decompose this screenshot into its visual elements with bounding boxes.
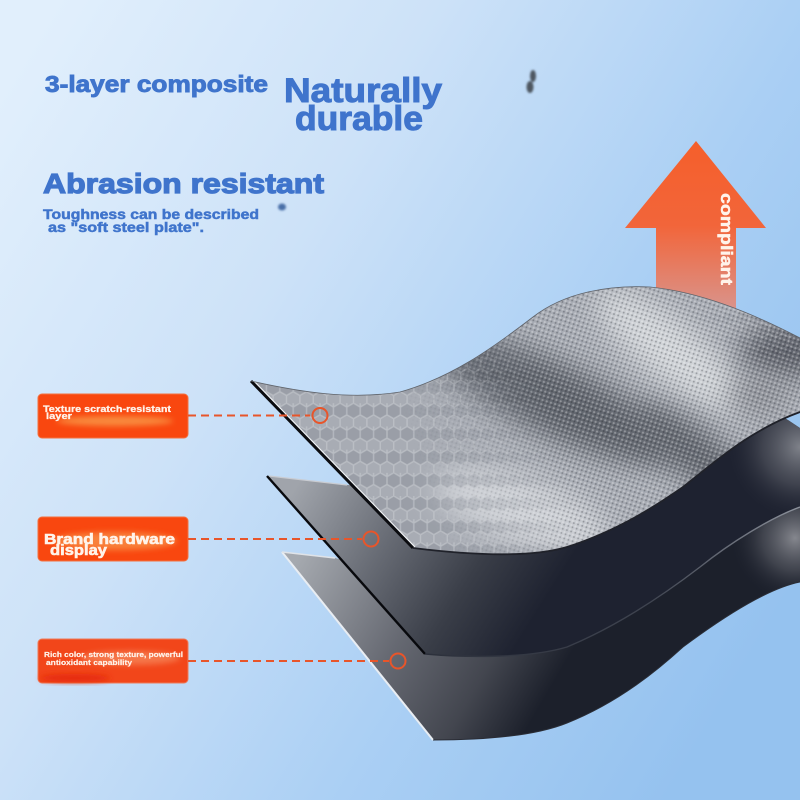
description text: as "soft steel plate". [48,219,204,235]
callout 3: rich color: antioxidant capability [46,658,133,667]
callout 1: texture layer: Texture scratch-resistant [43,404,172,415]
arrow: compliant [625,141,766,320]
layer 2: middle sheet [266,418,800,657]
heading: Naturally durable: durable [295,100,423,138]
artifact smudge small [278,204,286,210]
label box 3 [38,639,188,683]
layer 1: top textured sheet [250,286,800,556]
callout 3: rich color: Rich color, strong texture, powerful [44,650,183,659]
heading: Naturally durable [284,72,442,138]
label box 1 [38,394,188,438]
callout 1: texture layer: layer [46,411,72,422]
heading: Abrasion resistant: Abrasion resistant [43,168,324,199]
callout 3: rich color [38,639,406,683]
description text [43,206,259,235]
callout 2: brand hardware: display [50,543,107,559]
heading: Naturally durable: Naturally [284,72,442,110]
heading: 3-layer composite: 3-layer composite [45,71,268,97]
callout 2: brand hardware [38,517,378,561]
description text: Toughness can be described [43,206,259,222]
layer 3: bottom sheet [281,508,800,740]
callout 2: brand hardware: Brand hardware [44,532,175,548]
arrow: compliant: compliant [717,193,736,285]
callout 1: texture layer [38,394,328,438]
label box 2 [38,517,188,561]
artifact smudge top [526,70,536,93]
